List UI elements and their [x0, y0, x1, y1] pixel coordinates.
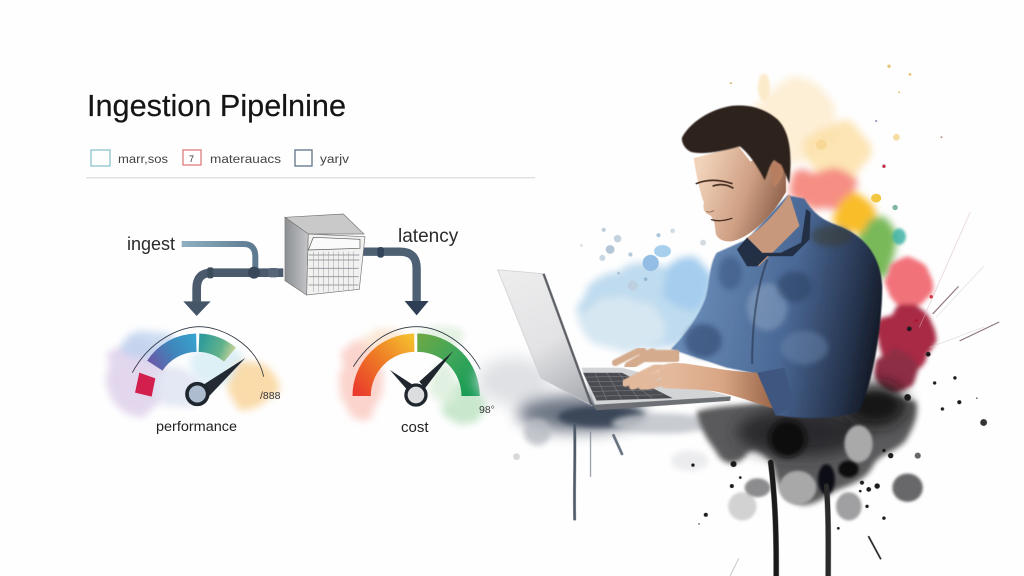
legend item: red: [183, 150, 281, 166]
gauge value: performance: /888: [260, 390, 281, 402]
blue paint droplets: [580, 228, 706, 291]
pipe: ingest: [182, 244, 255, 270]
black ink splash: [513, 65, 999, 576]
label: ingest: ingest: [127, 234, 175, 254]
title: Ingestion Pipelnine: [87, 88, 346, 123]
shirt: [671, 195, 882, 418]
legend item: slate: yarjv: [320, 154, 349, 166]
person: [615, 105, 882, 418]
illustration: person at laptop: [477, 65, 999, 576]
label: performance: performance: [156, 419, 237, 434]
grey ink wash: [477, 358, 713, 471]
legend item: red: materauacs: [210, 154, 281, 166]
gauge: cost: [340, 325, 485, 425]
gauge: performance: [107, 327, 277, 415]
facial features: [696, 180, 733, 221]
ear: [771, 161, 784, 187]
fingers: [625, 366, 673, 388]
forearm and near hand: [659, 363, 774, 409]
laptop: [498, 270, 731, 410]
label: cost: cost: [401, 419, 429, 436]
legend item: teal: marr,sos: [118, 154, 168, 166]
watercolor splash: blue: [578, 258, 720, 351]
pipeline diagram: [107, 214, 485, 425]
watercolor splash: red: [874, 258, 935, 391]
face: [694, 146, 786, 241]
legend: [91, 150, 349, 166]
far hand: [615, 349, 676, 366]
data box: [285, 214, 365, 295]
pipe: to cost: [360, 247, 417, 303]
label: latency: latency: [398, 226, 459, 247]
ink splatter dots: [513, 65, 987, 530]
gauge value: cost: 98°: [479, 404, 495, 416]
hair: [682, 105, 791, 184]
collar: [737, 196, 811, 266]
neck: [747, 194, 799, 266]
arrow: down to cost gauge: [405, 301, 429, 315]
legend item: teal: [91, 150, 168, 166]
arrow: down to performance gauge: [183, 301, 211, 316]
sleeve cuff: [757, 368, 794, 416]
pipe: lower to performance: [197, 267, 283, 303]
legend item: red: 7: [189, 154, 194, 164]
legend item: slate: [295, 150, 349, 166]
ink drips: [574, 212, 999, 576]
watercolor splash: warm: [754, 74, 906, 275]
